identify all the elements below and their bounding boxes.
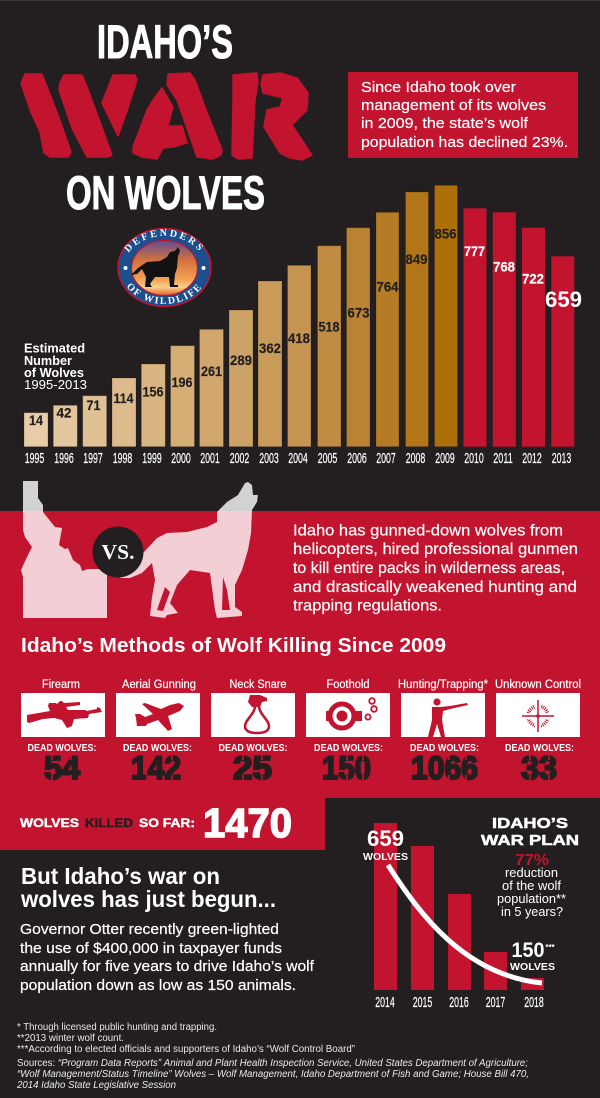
text block: Governor Otter funding <box>20 921 315 994</box>
panel: unknown control: 33 <box>521 750 557 786</box>
callout: Idaho's war plan: 77% <box>515 852 549 869</box>
callout: Idaho's war plan: in 5 years? <box>501 905 563 919</box>
callout: wolves killed so far <box>20 800 292 846</box>
icon: Defenders of Wildlife logo <box>117 228 212 308</box>
panel: firearm <box>21 679 105 786</box>
bar year labels: 1996 <box>54 450 74 467</box>
callout: wolves killed so far: KILLED <box>85 818 133 830</box>
bar values: 722 <box>522 270 544 286</box>
sources: “Wolf Management/Status Timeline” Wolves – Wolf Management, Idaho Department of Fish and Game; House Bill 470, <box>17 1069 529 1080</box>
bar values: 114 <box>114 390 134 406</box>
callout: population decline: in 2009, the state’s wolf <box>361 115 529 132</box>
sources <box>16 1058 529 1091</box>
heading: methods of wolf killing: Idaho’s Methods of Wolf Killing Since 2009 <box>21 634 446 657</box>
panel: hunting and trapping: Hunting/Trapping* <box>398 679 489 691</box>
heading: war has just begun <box>20 863 276 912</box>
panel: neck snare: DEAD WOLVES: <box>218 742 288 754</box>
chart year labels <box>375 994 544 1011</box>
panel: aerial gunning <box>116 679 200 786</box>
heading: war has just begun: wolves has just begun... <box>20 886 276 912</box>
callout: wolves killed so far: SO FAR: <box>139 818 195 830</box>
icon: Defenders of Wildlife logo: DEFENDERS <box>124 229 204 253</box>
panel: hunting and trapping: 1066 <box>411 750 478 786</box>
panel: foothold: Foothold <box>326 679 370 691</box>
chart year labels: 2015 <box>413 994 432 1011</box>
callout: Idaho's war plan: reduction <box>505 866 558 880</box>
bar year labels: 1999 <box>142 450 162 467</box>
chart year labels: 2014 <box>375 994 395 1011</box>
sources: 2014 Idaho State Legislative Session <box>16 1080 176 1091</box>
icon: hunter aiming rifle <box>428 698 468 737</box>
icon: foothold trap with chain <box>326 698 377 728</box>
text block: Idaho's tactics: trapping regulations. <box>293 598 442 614</box>
bar year labels: 2013 <box>552 450 571 467</box>
end label: 150 wolves: 150 <box>512 939 544 962</box>
callout: population decline <box>348 72 578 158</box>
bar chart: wolf population 1995-2013 <box>24 185 582 467</box>
bar values: 518 <box>318 318 340 334</box>
text block: Idaho's tactics: helicopters, hired professional gunmen <box>293 541 578 558</box>
bar values: 71 <box>86 397 101 413</box>
chart year labels: 2018 <box>524 994 544 1011</box>
text block: Idaho's tactics: to kill entire packs in wilderness areas, <box>293 560 565 577</box>
panel: unknown control: Unknown Control <box>495 679 581 691</box>
icon: noose <box>245 695 269 733</box>
bar year labels: 1998 <box>113 450 132 467</box>
panel: foothold: DEAD WOLVES: <box>314 742 383 754</box>
end label: 150 wolves: *** <box>545 943 556 952</box>
bar year labels <box>25 450 571 467</box>
bar values: 659 <box>545 287 582 312</box>
bar year labels: 2010 <box>464 450 484 467</box>
footnotes: ***According to elected officials and supporters of Idaho’s “Wolf Control Board” <box>17 1044 355 1055</box>
callout: Idaho's war plan <box>481 815 579 919</box>
panel: hunting and trapping: DEAD WOLVES: <box>410 742 479 754</box>
callout: Idaho's war plan: WAR PLAN <box>481 832 579 849</box>
callout: population decline: population has declined 23%. <box>361 134 568 151</box>
panel: unknown control: DEAD WOLVES: <box>505 742 574 754</box>
chart label: estimated number of wolves: 1995-2013 <box>24 378 87 392</box>
bar values: 764 <box>376 278 399 294</box>
bar values: 362 <box>259 340 281 356</box>
heading: war has just begun: But Idaho’s war on <box>21 863 220 889</box>
bar values: 196 <box>172 374 193 390</box>
bar values: 418 <box>288 330 310 346</box>
bar year labels: 2005 <box>318 450 337 467</box>
end label: 150 wolves: WOLVES <box>510 962 555 973</box>
title <box>21 15 312 219</box>
icon: Idaho state silhouette <box>21 481 107 618</box>
chart year labels: 2017 <box>486 994 505 1011</box>
panel: firearm: DEAD WOLVES: <box>28 742 96 754</box>
text block: Governor Otter funding: population down as low as 150 animals. <box>20 977 296 994</box>
text block: Idaho's tactics: and drastically weakened hunting and <box>293 579 577 596</box>
callout: wolves killed so far: 1470 <box>203 800 292 846</box>
bar year labels: 1997 <box>83 450 103 467</box>
callout: Idaho's war plan: population** <box>497 892 566 906</box>
title word: WAR drawn as rough letters <box>21 73 312 160</box>
chart label: estimated number of wolves: of Wolves <box>24 366 84 380</box>
bar values: 156 <box>142 383 164 399</box>
bar year labels: 2003 <box>259 450 279 467</box>
panel: foothold: 150 <box>322 750 371 786</box>
bar values <box>29 225 582 428</box>
callout: Idaho's war plan: of the wolf <box>502 879 562 893</box>
chart label: estimated number of wolves: Number <box>24 354 72 368</box>
panel: firearm: Firearm <box>42 679 80 691</box>
callout: wolves killed so far: WOLVES <box>20 818 79 830</box>
bar chart: projected wolf decline 2014-2018 <box>363 823 556 1011</box>
title line: Idaho's: IDAHO’S <box>97 15 233 68</box>
text block: Idaho's tactics <box>293 522 578 614</box>
bar year labels: 2000 <box>171 450 191 467</box>
chart label: estimated number of wolves: Estimated <box>24 342 85 356</box>
text block: Governor Otter funding: the use of $400,000 in taxpayer funds <box>20 940 282 957</box>
panel: neck snare <box>211 679 295 786</box>
bar year labels: 2001 <box>200 450 220 467</box>
text block: Governor Otter funding: annually for five years to drive Idaho’s wolf <box>20 958 315 975</box>
bar year labels: 2002 <box>230 450 249 467</box>
bar values: 849 <box>406 251 428 267</box>
panel: neck snare: Neck Snare <box>230 679 286 691</box>
bar values: 42 <box>56 404 72 420</box>
bar year labels: 2007 <box>376 450 396 467</box>
bar values: 768 <box>493 258 515 274</box>
end label: 150 wolves <box>510 939 556 973</box>
bar year labels: 2008 <box>406 450 425 467</box>
footnotes: **2013 winter wolf count. <box>17 1033 124 1044</box>
chart label: estimated number of wolves <box>24 342 87 392</box>
bar values: 673 <box>348 304 370 320</box>
bar year labels: 2009 <box>435 450 455 467</box>
panel: unknown control <box>495 679 581 786</box>
icon: rifle <box>27 701 102 728</box>
title line: on wolves: ON WOLVES <box>66 166 265 219</box>
start label: 659 wolves: WOLVES <box>363 852 408 863</box>
callout: population decline: Since Idaho took over <box>361 79 516 96</box>
start label: 659 wolves <box>363 826 408 863</box>
callout: Idaho's war plan: IDAHO’S <box>492 815 568 832</box>
text block: Idaho's tactics: Idaho has gunned-down wolves from <box>293 522 563 540</box>
bar year labels: 2004 <box>288 450 308 467</box>
callout: population decline: management of its wolves <box>361 97 546 114</box>
chart year labels: 2016 <box>449 994 469 1011</box>
bar values: 856 <box>434 225 457 241</box>
panel: aerial gunning: DEAD WOLVES: <box>123 742 192 754</box>
decline curve <box>388 865 542 983</box>
icon: VS badge: VS. <box>102 540 134 564</box>
bar year labels: 2006 <box>347 450 367 467</box>
icon: airplane <box>135 703 184 731</box>
bar values: 14 <box>29 412 43 428</box>
bar values: 289 <box>230 352 252 368</box>
panel: neck snare: 25 <box>233 750 272 786</box>
start label: 659 wolves: 659 <box>367 826 404 851</box>
bar year labels: 2011 <box>493 450 513 467</box>
bar values: 777 <box>464 243 485 259</box>
icon: VS badge <box>92 526 144 578</box>
icon: Defenders of Wildlife logo: OF WILDLIFE <box>128 284 202 304</box>
footnotes <box>17 1022 355 1055</box>
bar year labels: 1995 <box>25 450 44 467</box>
icon: howling wolf silhouette <box>120 482 258 618</box>
panel: red middle band <box>0 511 600 850</box>
bar values: 261 <box>201 363 222 379</box>
footnotes: * Through licensed public hunting and trapping. <box>17 1022 217 1033</box>
sources: Sources: “Program Data Reports” Animal and Plant Health Inspection Service, United States Department of Agriculture; <box>17 1058 528 1069</box>
panel: aerial gunning: Aerial Gunning <box>122 679 196 691</box>
bar year labels: 2012 <box>522 450 542 467</box>
icon: crosshair <box>522 700 554 732</box>
panel: foothold <box>306 679 390 786</box>
panel: aerial gunning: 142 <box>131 750 181 786</box>
panel: hunting and trapping <box>398 679 489 786</box>
panel: firearm: 54 <box>44 750 80 786</box>
text block: Governor Otter funding: Governor Otter recently green-lighted <box>20 921 279 938</box>
